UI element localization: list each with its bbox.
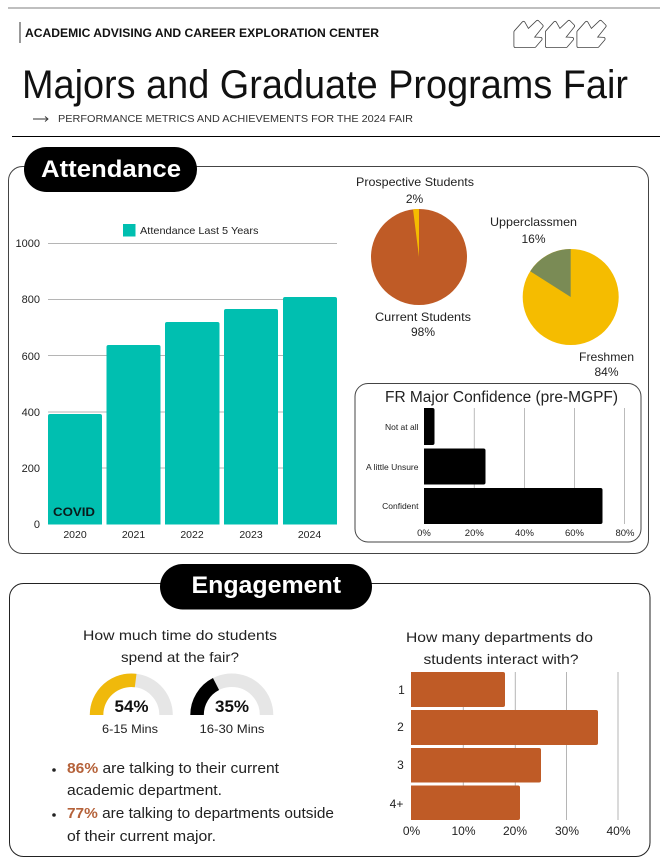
bar chart: confidence: Confident: [382, 501, 419, 511]
bar chart: attendance last 5 years: 2024: [298, 529, 321, 541]
bar chart: attendance last 5 years: 0: [34, 519, 40, 531]
bar chart: attendance last 5 years: [16, 224, 337, 541]
bar chart: departments interacted with: 4+: [390, 797, 403, 811]
gauge: 35 percent 16-30 minutes: 16-30 Mins: [200, 722, 264, 736]
question: departments: students interact with?: [424, 651, 579, 667]
bar chart: departments interacted with: 30%: [555, 824, 579, 838]
pie chart: current vs prospective students: 98%: [411, 325, 435, 339]
question: time at the fair: [83, 627, 277, 665]
pie chart: current vs prospective students: 2%: [406, 192, 424, 206]
bullet list: department stats: of their current major.: [67, 829, 216, 845]
pie chart: freshmen vs upperclassmen: 16%: [521, 232, 546, 246]
chart title: FR Major Confidence (pre-MGPF): [385, 389, 618, 406]
bar chart: confidence: 80%: [615, 528, 635, 539]
heading: engagement pill: [160, 564, 372, 610]
pie chart: freshmen vs upperclassmen: [490, 215, 634, 379]
panel: freshman major confidence: [355, 384, 641, 542]
heading: attendance pill: Attendance: [41, 156, 181, 183]
bar chart: attendance last 5 years: 2021: [122, 529, 145, 541]
bar chart: attendance last 5 years: 800: [22, 294, 40, 306]
icon: three outlined arrows logo: [516, 22, 604, 46]
bar chart: attendance last 5 years: 2023: [239, 529, 263, 541]
bullet list: department stats: [52, 761, 334, 845]
bar chart: attendance last 5 years: 1000: [16, 238, 40, 250]
gauge: 54 percent 6-15 minutes: 54%: [114, 697, 149, 716]
bar chart: attendance last 5 years: 2020: [63, 529, 87, 541]
bar chart: departments interacted with: [390, 672, 631, 838]
bar chart: confidence: 0%: [417, 528, 431, 539]
question: time at the fair: How much time do students: [83, 627, 277, 643]
bullet list: department stats: academic department.: [67, 783, 222, 799]
bar chart: attendance last 5 years: Attendance Last 5 Years: [140, 225, 258, 237]
bar chart: departments interacted with: 0%: [403, 824, 421, 838]
subtitle with arrow: PERFORMANCE METRICS AND ACHIEVEMENTS FOR THE 2024 FAIR: [58, 114, 413, 125]
question: time at the fair: spend at the fair?: [121, 649, 239, 665]
pie chart: freshmen vs upperclassmen: 84%: [594, 365, 619, 379]
bar chart: confidence: 60%: [565, 528, 585, 539]
gauge: 35 percent 16-30 minutes: 35%: [215, 697, 249, 716]
bullet list: department stats: 77% are talking to departments outside: [67, 806, 334, 822]
pie chart: freshmen vs upperclassmen: Upperclassmen: [490, 215, 577, 229]
bar chart: attendance last 5 years: 200: [22, 463, 40, 475]
gauge: 35 percent 16-30 minutes: [197, 680, 267, 736]
panel: attendance: [8, 147, 648, 554]
bar chart: confidence: A little Unsure: [366, 462, 419, 472]
bar chart: departments interacted with: 20%: [503, 824, 527, 838]
bar chart: attendance last 5 years: 400: [22, 407, 40, 419]
bar chart: departments interacted with: 2: [397, 720, 404, 734]
bar chart: attendance last 5 years: 2022: [180, 529, 204, 541]
question: departments: How many departments do: [406, 629, 593, 645]
bar chart: confidence: Not at all: [385, 422, 419, 432]
bar chart: confidence: 40%: [515, 528, 535, 539]
bar chart: departments interacted with: 10%: [451, 824, 476, 838]
heading: attendance pill: [24, 147, 197, 192]
bullet list: department stats: 86% are talking to their current: [67, 761, 279, 777]
bar chart: departments interacted with: 1: [398, 683, 405, 697]
pie chart: current vs prospective students: [356, 175, 474, 339]
question: departments: [406, 629, 593, 667]
gauge: 54 percent 6-15 minutes: 6-15 Mins: [102, 722, 158, 736]
bar chart: confidence: [366, 408, 635, 539]
bar chart: attendance last 5 years: COVID: [53, 505, 95, 519]
heading: engagement pill: Engagement: [192, 572, 341, 599]
panel: engagement: [10, 564, 650, 856]
bar chart: departments interacted with: 40%: [606, 824, 631, 838]
title: Majors and Graduate Programs Fair: [22, 63, 628, 107]
organization heading: ACADEMIC ADVISING AND CAREER EXPLORATION CENTER: [25, 26, 379, 40]
gauge: 54 percent 6-15 minutes: [97, 680, 166, 736]
bar chart: confidence: 20%: [465, 528, 484, 539]
pie chart: current vs prospective students: Current Students: [375, 310, 471, 324]
bar chart: departments interacted with: 3: [397, 758, 404, 772]
pie chart: current vs prospective students: Prospective Students: [356, 175, 474, 189]
pie chart: freshmen vs upperclassmen: Freshmen: [579, 350, 634, 364]
bar chart: attendance last 5 years: 600: [22, 351, 40, 363]
